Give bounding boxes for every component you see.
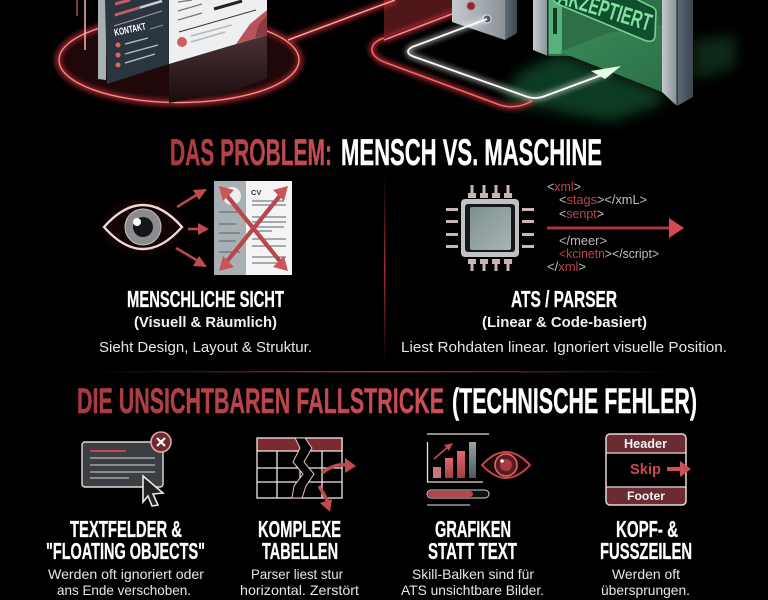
code snippet: <kcinetn></script> — [559, 246, 659, 261]
heading: Die unsichtbaren Fallstricke: DIE UNSICHTBAREN FALLSTRICKE — [77, 382, 444, 421]
icon: text box with cursor — [82, 432, 171, 506]
icon: header skip footer page: Footer — [627, 489, 665, 503]
card title — [428, 516, 517, 564]
card title: TEXTFELDER & — [70, 516, 182, 542]
code snippet: <stags></xmL> — [559, 192, 647, 207]
card title: FUSSZEILEN — [600, 538, 692, 564]
panel: ATS parser — [401, 179, 727, 356]
icon: header skip footer page: Header — [624, 436, 667, 451]
card title — [258, 516, 341, 564]
card text — [401, 566, 544, 598]
sign AKZEPTIERT — [553, 0, 656, 41]
code snippet: <xml> — [547, 179, 581, 194]
icon: chart with eye — [427, 434, 530, 506]
heading: Das Problem: MENSCH VS. MASCHINE — [341, 132, 602, 173]
CV document on platform: KONTAKT — [113, 22, 147, 39]
icon: header skip footer page — [606, 434, 691, 505]
arrow: linear read — [547, 218, 684, 238]
card title — [600, 516, 692, 564]
icon: eye — [104, 205, 182, 249]
card text: ans Ende verschoben. — [57, 582, 191, 598]
card text — [48, 566, 204, 598]
title: ATS Parser: ATS / PARSER — [511, 286, 617, 312]
red path from platform to scanner — [288, 0, 532, 107]
icon: CV page with crossing arrows — [214, 181, 292, 275]
card text: Skill-Balken sind für — [412, 566, 534, 582]
code snippet — [547, 179, 659, 274]
code snippet: </xml> — [547, 259, 586, 274]
scanner box — [452, 0, 517, 40]
divider: vertical — [384, 175, 385, 365]
subtitle: linear: (Linear & Code-basiert) — [482, 315, 647, 331]
icon: chip — [446, 185, 534, 271]
heading: Das Problem: DAS PROBLEM: — [170, 132, 332, 173]
hero illustration: CV to scanner and gate — [58, 0, 735, 122]
description: human: Sieht Design, Layout & Struktur. — [99, 339, 312, 356]
card title: GRAFIKEN — [435, 516, 511, 542]
card title: "FLOATING OBJECTS" — [46, 538, 205, 564]
icon: CV page with crossing arrows: CV — [251, 188, 261, 197]
card title: KOMPLEXE — [258, 516, 341, 542]
white accepted path with arrow — [408, 19, 621, 98]
green gate with sign — [533, 0, 693, 106]
card: Kopf- und Fusszeilen — [600, 434, 692, 598]
card text: Werden oft — [612, 566, 680, 582]
card text: Werden oft ignoriert oder — [48, 566, 204, 582]
CV document on platform — [98, 0, 267, 103]
icon: broken table — [257, 438, 356, 512]
icon: header skip footer page: Skip — [630, 461, 661, 478]
title: Menschliche Sicht: MENSCHLICHE SICHT — [127, 286, 284, 312]
subtitle: visuell: (Visuell & Räumlich) — [134, 315, 277, 331]
card: Textfelder — [46, 432, 205, 598]
red and green floor glow — [59, 0, 735, 122]
card text: horizontal. Zerstört — [240, 582, 359, 598]
card: Komplexe Tabellen — [240, 438, 359, 598]
card title: TABELLEN — [262, 538, 338, 564]
card title: KOPF- & — [616, 516, 678, 542]
card text: Parser liest stur — [251, 566, 343, 582]
card text: übersprungen. — [601, 582, 690, 598]
panel: human view — [99, 181, 312, 356]
card text: ATS unsichtbare Bilder. — [401, 582, 544, 598]
description: parser: Liest Rohdaten linear. Ignoriert visuelle Position. — [401, 339, 727, 356]
card text — [601, 566, 690, 598]
card text — [240, 566, 359, 598]
code snippet: <senpt> — [559, 206, 604, 221]
glowing red platform ring — [58, 0, 300, 103]
divider: horizontal — [90, 371, 680, 372]
arrows from eye to CV — [176, 189, 209, 267]
heading: Das Problem — [170, 132, 602, 173]
card title — [46, 516, 205, 564]
card: Grafiken statt Text — [401, 434, 544, 598]
code snippet: </meer> — [559, 233, 607, 248]
card title: STATT TEXT — [428, 538, 517, 564]
